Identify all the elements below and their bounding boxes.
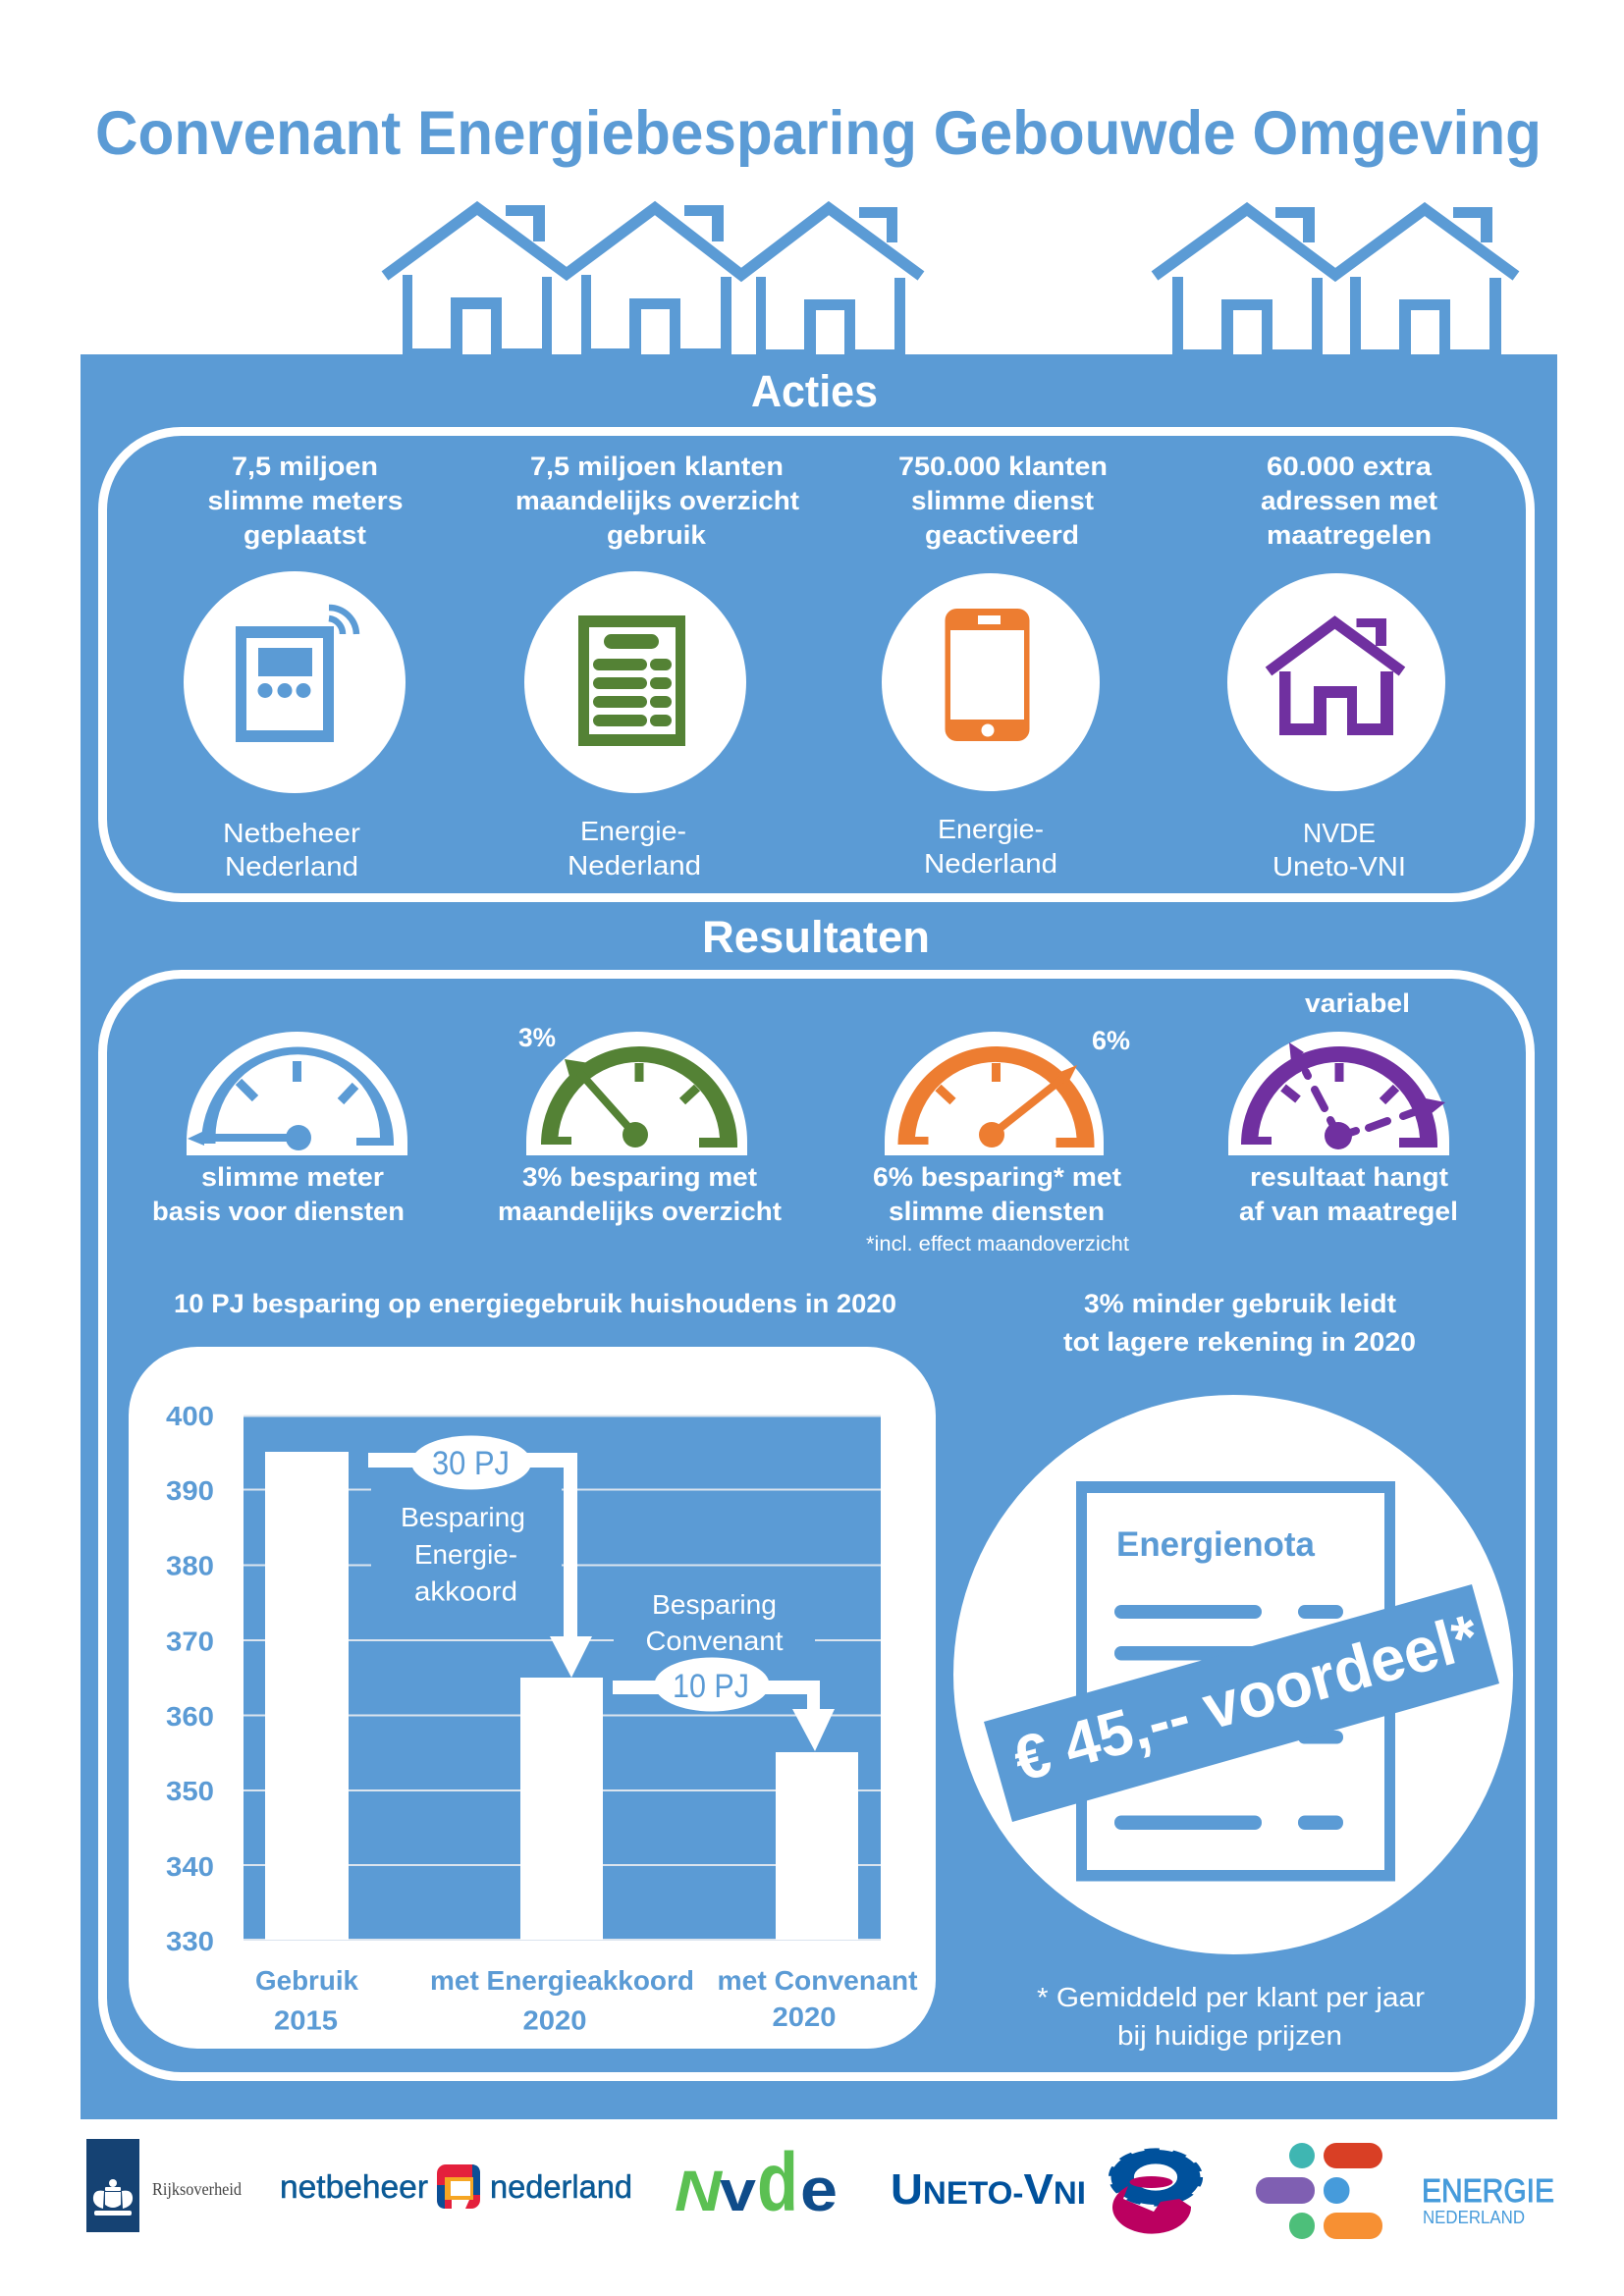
text: Energienota: Energienota [1116,1525,1316,1564]
axis labels: 360 [166,1701,214,1732]
logo: netbeheer nederland [280,2164,632,2209]
heading: bill title: tot lagere rekening in 2020 [1063,1327,1416,1357]
text: Besparing Energieakkoord [401,1502,525,1606]
text: gauge 4 caption: resultaat hangt [1250,1162,1448,1192]
text: Besparing Energieakkoord: Besparing [401,1502,525,1532]
text: action 4: 60.000 extra [1267,452,1433,481]
axis labels: 340 [166,1851,214,1882]
text: Besparing Convenant: Besparing [652,1589,777,1620]
category label 2 [430,1965,694,2036]
logo: NVDE: v [720,2160,756,2223]
text: gauge 3 caption: *incl. effect maandoverzicht [866,1233,1129,1255]
logo: netbeheer nederland: nederland [490,2168,632,2205]
text: responsible party 4: Uneto-VNI [1272,851,1406,881]
text: Besparing Convenant [646,1589,784,1656]
logo: NVDE [675,2136,838,2228]
category label 1: Gebruik [255,1965,358,1996]
text: responsible party 3: Nederland [924,848,1057,879]
heading: bill title: 3% minder gebruik leidt [1084,1289,1396,1318]
logo: Rijksoverheid: Rijksoverheid [152,2179,242,2199]
icon: smart meter [184,571,406,793]
category label 2: 2020 [522,2004,587,2036]
axis labels: 390 [166,1475,214,1506]
text: gauge 4 caption: af van maatregel [1239,1197,1458,1226]
text: Besparing Convenant: Convenant [646,1626,784,1656]
logo: NVDE: d [757,2136,798,2228]
text: gauge 2 caption: maandelijks overzicht [498,1197,782,1226]
text: action 3: geactiveerd [925,520,1079,550]
text: responsible party 1: Netbeheer [223,818,360,848]
label: variabel: variabel [1305,988,1410,1018]
text: gauge 1 caption: slimme meter [201,1162,385,1192]
text: action 3 [898,452,1108,550]
gauge: smart meter [187,1032,407,1155]
text: responsible party 4: NVDE [1303,818,1376,848]
text: gauge 1 caption: basis voor diensten [152,1197,405,1226]
text: action 4: adressen met [1261,486,1437,515]
text: gauge 3 caption: slimme diensten [889,1197,1105,1226]
text: action 1: slimme meters [208,486,403,515]
logo: Uneto-VNI [891,2152,1198,2234]
text: action 4 [1261,452,1437,550]
text: responsible party 3: Energie- [938,814,1044,844]
text: footnote [1037,1982,1425,2051]
heading: bill title [1063,1289,1416,1357]
logo: NVDE: N [675,2160,723,2223]
bar: met Energieakkoord 2020 [520,1678,603,1940]
arrow: 10 PJ savings [613,1681,835,1751]
banner: savings: € 45,-- voordeel* [1006,1601,1487,1795]
axis labels: 350 [166,1776,214,1806]
logo: Rijksoverheid [86,2139,242,2232]
heading: Acties: Acties [751,366,878,416]
axis labels: 400 [166,1401,214,1431]
icon: purple house [1227,573,1445,791]
text: action 4: maatregelen [1267,520,1432,550]
text: action 2: 7,5 miljoen klanten [530,452,784,481]
logo: NVDE: e [800,2157,838,2224]
logo: Energie Nederland: NEDERLAND [1423,2208,1525,2227]
axis labels: 330 [166,1926,214,1956]
category label 2: met Energieakkoord [430,1965,694,1996]
text: action 2: maandelijks overzicht [515,486,799,515]
text: gauge 2 caption: 3% besparing met [522,1162,757,1192]
logo: Energie Nederland [1256,2143,1554,2239]
text: gauge 2 caption [498,1162,782,1226]
panel: resultaten [102,974,1530,2077]
category label 1: 2015 [274,2004,338,2036]
text: action 2: gebruik [607,520,707,550]
text: responsible party 1 [223,818,360,881]
axis labels: 380 [166,1551,214,1580]
heading: Resultaten: Resultaten [702,912,930,962]
arrow: 30 PJ savings [368,1453,592,1678]
category label 3: 2020 [772,2002,837,2032]
logo: Energie Nederland: ENERGIE [1422,2172,1554,2209]
chart plot area [244,1415,881,1940]
icon: bill document [1076,1481,1395,1881]
text: footnote: bij huidige prijzen [1117,2020,1342,2051]
text: gauge 4 caption [1239,1162,1458,1226]
text: responsible party 2: Energie- [580,816,686,846]
axis labels [166,1401,214,1956]
text: Besparing Energieakkoord: Energie- [414,1539,517,1570]
gauge: 6% savings [885,1032,1104,1155]
logo: Uneto-VNI: UNETO-VNI [891,2165,1086,2214]
callout: 30 PJ [411,1435,531,1490]
text: gauge 3 caption [866,1162,1129,1255]
gauge: variable result [1228,1032,1449,1155]
callout: 30 PJ: 30 PJ [432,1445,510,1482]
main blue background panel [81,354,1557,2119]
axis labels: 370 [166,1626,214,1657]
heading: chart title: 10 PJ besparing op energiegebruik huishoudens in 2020 [174,1289,896,1318]
callout: 10 PJ [654,1657,770,1712]
text: action 2 [515,452,799,550]
text: action 3: slimme dienst [911,486,1094,515]
panel: acties [102,432,1530,897]
text: Besparing Energieakkoord: akkoord [414,1576,517,1606]
label: 6%: 6% [1092,1026,1130,1055]
callout: 10 PJ: 10 PJ [673,1668,749,1705]
icon: row of three houses [385,205,921,354]
text: responsible party 4 [1272,818,1406,881]
text: gauge 3 caption: 6% besparing* met [873,1162,1121,1192]
text: responsible party 2: Nederland [568,850,701,881]
bar: met Convenant 2020 [776,1752,858,1940]
text: responsible party 1: Nederland [225,851,358,881]
category label 1 [255,1965,358,2036]
text: footnote: * Gemiddeld per klant per jaar [1037,1982,1425,2012]
icon: pair of houses [1155,207,1516,354]
text: gauge 1 caption [152,1162,405,1226]
text: responsible party 3 [924,814,1057,879]
title: Convenant Energiebesparing Gebouwde Omgeving [95,99,1542,168]
text: action 1: geplaatst [244,520,366,550]
category label 3 [717,1965,917,2032]
text: action 3: 750.000 klanten [898,452,1108,481]
text: action 1: 7,5 miljoen [232,452,378,481]
category label 3: met Convenant [717,1965,917,1996]
icon: monthly overview document [524,571,746,793]
text: action 1 [208,452,403,550]
gauge: 3% savings [526,1032,747,1155]
text: responsible party 2 [568,816,701,881]
logo: netbeheer nederland: netbeheer [280,2168,428,2205]
panel: bar chart card [129,1347,936,2049]
panel: energy bill circle [953,1395,1513,1954]
icon: smartphone [882,573,1100,791]
bar: Gebruik 2015 [265,1452,349,1940]
label: 3%: 3% [518,1023,556,1052]
